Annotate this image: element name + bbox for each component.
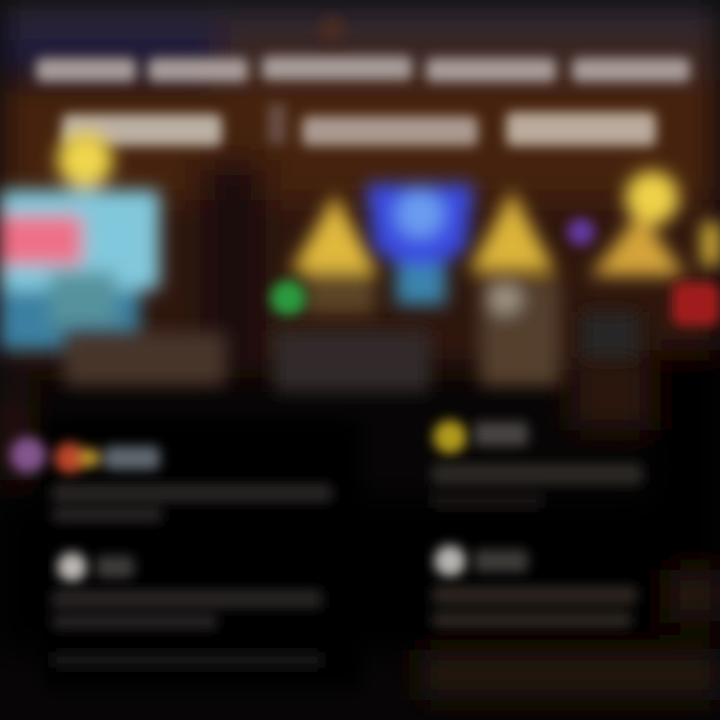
label: yellow badge [474,422,528,446]
icon: left white badge [57,552,87,582]
icon: green marker [270,280,306,316]
panel: lower right card [432,420,642,628]
icon: top ornament [319,17,345,43]
title [36,56,690,146]
text block: right first [432,464,642,508]
panel: left illustration [0,132,160,350]
panel: center-left bell [290,194,378,314]
icons: category markers [10,437,160,474]
panel: lower left card [10,420,360,688]
icon: red marker [672,282,720,326]
text block: left first [52,484,332,522]
icon: yellow badge [433,420,467,454]
panel: center-right bell [468,190,560,386]
label: right badge [474,550,528,572]
caption panels [64,330,430,392]
text block: left second [52,590,322,668]
icon: blue shield [366,184,474,305]
icon: right white badge [434,545,466,577]
text block: right second [432,586,637,628]
panel: right bell [582,171,720,358]
label: left badge [96,556,134,578]
icon: purple marker [567,218,595,246]
